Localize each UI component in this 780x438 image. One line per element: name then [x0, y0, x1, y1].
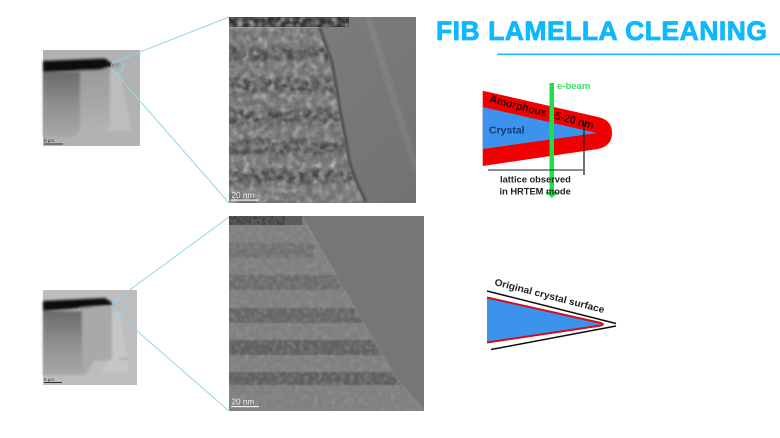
scale bar: bottom overview: 8 µm [44, 377, 54, 382]
original crystal surface lines [487, 291, 616, 350]
label: original crystal surface: Original crystal surface [493, 277, 606, 316]
blue crystal core [487, 298, 601, 342]
panel: top overview TEM micrograph [43, 50, 140, 146]
diagram: cleaned lamella with thin amorphous layer [487, 277, 616, 350]
label: lattice observed: lattice observed [500, 174, 571, 184]
label: crystal: Crystal [489, 124, 525, 136]
label: HRTEM mode: in HRTEM mode [500, 186, 571, 196]
connector: top zoom callout [111, 17, 229, 203]
panel: bottom HRTEM image after cleaning [229, 216, 424, 411]
red thin amorphous layer [487, 298, 603, 342]
scale bar label: 20 nm [232, 191, 254, 200]
panel: top HRTEM image before cleaning [229, 17, 417, 203]
dark top protective layer [229, 216, 302, 225]
crystal stack [229, 27, 369, 203]
blue crystal core [483, 107, 597, 149]
crystal stack [229, 225, 424, 411]
label: amorphous thickness: Amorphous ~5-20 nm [488, 93, 595, 132]
rough amorphous edge [320, 28, 366, 202]
title underline [497, 54, 780, 55]
panel: bottom overview TEM micrograph [43, 290, 137, 385]
scale bar label: 20 nm [232, 398, 254, 406]
lattice extent marker [488, 122, 584, 175]
diagram: lamella with thick amorphous layer [483, 81, 612, 198]
e-beam arrow [546, 83, 558, 198]
light diagonal streak [368, 18, 416, 166]
thin crystal edge [302, 218, 424, 410]
dark top protective layer [229, 17, 349, 27]
title: FIB LAMELLA CLEANING [436, 16, 767, 46]
label: e-beam: e-beam [557, 81, 590, 92]
connector: bottom zoom callout [112, 217, 229, 411]
red amorphous layer [483, 91, 612, 166]
scale bar: top overview: 8 µm [44, 138, 54, 143]
